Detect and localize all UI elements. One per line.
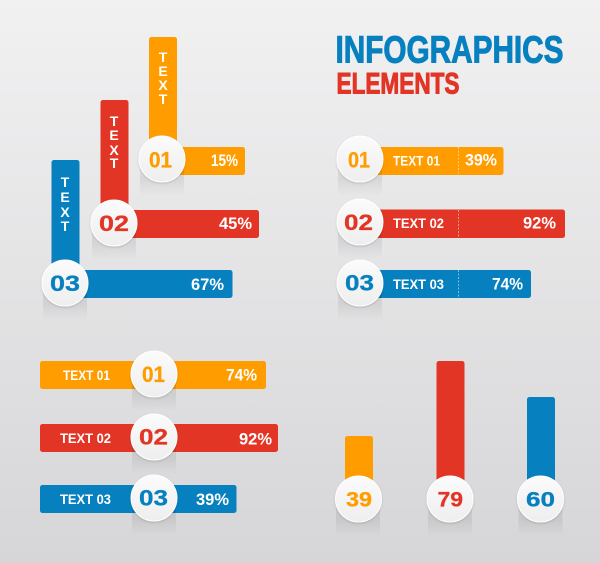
row 02 red: TEXT 02: [393, 215, 444, 231]
item 01 orange L bar: T: [159, 91, 168, 107]
row 01 orange: TEXT 01: [63, 367, 110, 383]
item 02 red L bar: 02: [99, 211, 129, 236]
row 02 red: 92%: [239, 430, 272, 448]
item 02 red L bar: 45%: [219, 214, 252, 233]
row 03 blue: [337, 260, 531, 320]
item 03 blue L bar: E: [60, 189, 70, 205]
row 03 blue: [40, 475, 236, 535]
item 01 orange L bar: X: [158, 77, 168, 93]
item 03 blue L bar: 03: [50, 271, 80, 296]
row 01 orange: 39%: [465, 150, 497, 170]
item 03 blue L bar: X: [60, 204, 70, 220]
row 03 blue: 74%: [492, 274, 523, 294]
row 01 orange: 74%: [226, 366, 257, 384]
item 02 red L bar: X: [109, 142, 119, 158]
row 01 orange: [40, 351, 266, 411]
title: [336, 30, 564, 100]
item 01 orange L bar: [139, 37, 245, 196]
row 02 red: 02: [139, 424, 168, 450]
row 01 orange: 01: [348, 148, 370, 172]
bar 79 red: [427, 361, 473, 536]
row 01 orange: [337, 136, 504, 196]
panel: horizontal bars with dashed divider: [337, 136, 565, 320]
bar 39 orange: [336, 436, 382, 536]
panel: L-shaped bars: [42, 37, 259, 320]
heading: elements: ELEMENTS: [336, 68, 460, 100]
item 03 blue L bar: [42, 160, 232, 320]
bar 39 orange: 39: [346, 488, 372, 512]
panel: bars with centred badges: [40, 351, 278, 535]
bar chart: vertical bars with value badges: [336, 361, 564, 536]
bar 60 blue: [518, 397, 564, 536]
row 02 red: [337, 199, 565, 259]
row 01 orange: TEXT 01: [393, 152, 440, 168]
row 03 blue: 03: [345, 270, 374, 296]
item 02 red L bar: E: [109, 127, 119, 143]
item 01 orange L bar: 01: [149, 148, 172, 172]
item 01 orange L bar: T: [159, 49, 168, 65]
item 02 red L bar: T: [110, 113, 119, 129]
bar 60 blue: 60: [526, 488, 555, 512]
item 01 orange L bar: 15%: [211, 151, 238, 170]
row 03 blue: 03: [139, 486, 168, 510]
row 03 blue: 39%: [196, 490, 229, 509]
row 02 red: TEXT 02: [60, 430, 111, 446]
item 03 blue L bar: T: [61, 174, 70, 190]
bar 79 red: 79: [438, 488, 463, 512]
row 01 orange: 01: [142, 362, 165, 387]
item 03 blue L bar: T: [61, 218, 70, 234]
row 03 blue: TEXT 03: [60, 491, 111, 507]
row 02 red: [40, 414, 278, 474]
row 03 blue: TEXT 03: [393, 276, 444, 292]
item 02 red L bar: T: [110, 155, 119, 171]
row 02 red: 02: [344, 210, 373, 235]
item 03 blue L bar: 67%: [191, 275, 224, 294]
item 02 red L bar: [91, 100, 259, 260]
row 02 red: 92%: [523, 214, 556, 232]
item 01 orange L bar: E: [158, 63, 168, 79]
